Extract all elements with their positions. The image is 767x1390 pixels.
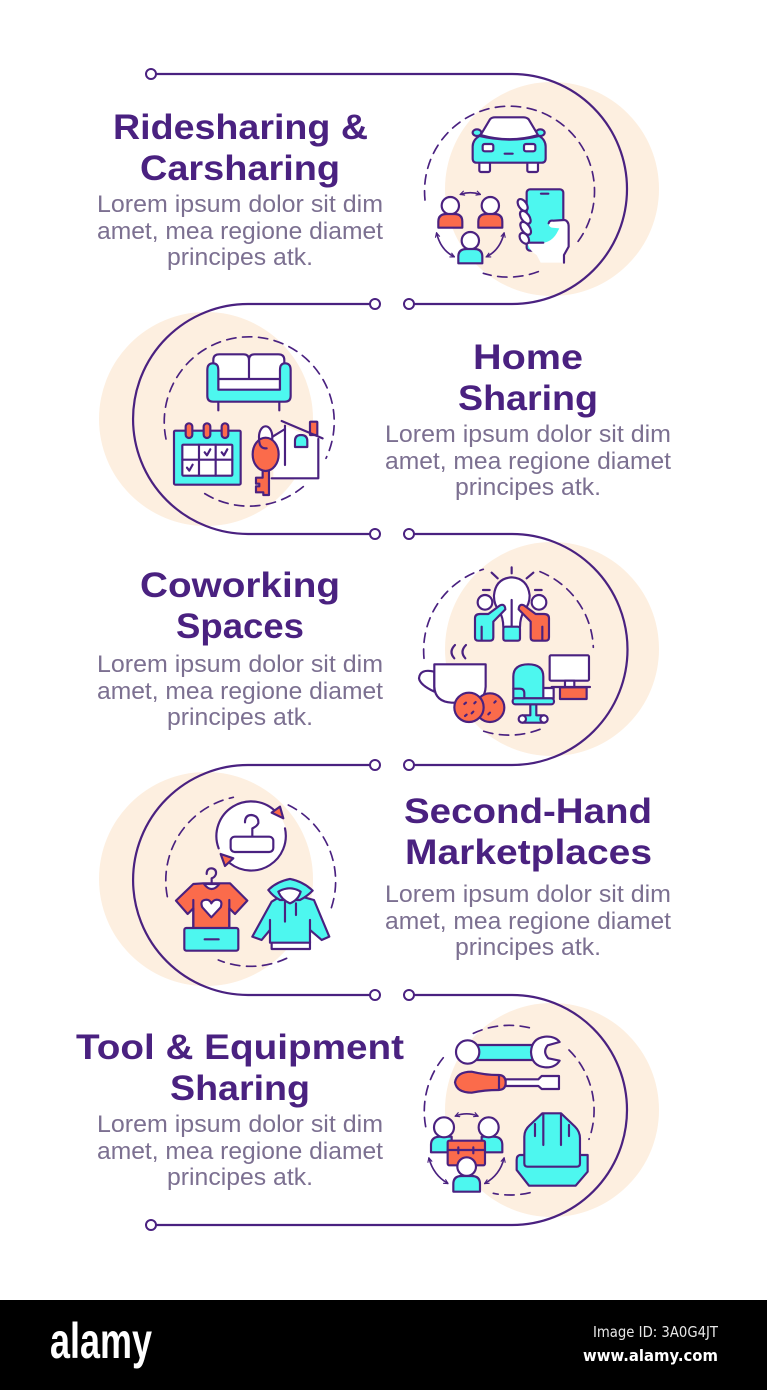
body text: amet, mea regione diamet bbox=[97, 1138, 383, 1165]
body text: principes atk. bbox=[167, 244, 313, 271]
body text: amet, mea regione diamet bbox=[385, 908, 671, 935]
peach circle bbox=[445, 542, 659, 756]
connector line bbox=[150, 995, 627, 1225]
heading: Sharing bbox=[458, 379, 598, 418]
heading: Home bbox=[473, 338, 583, 377]
peach circle bbox=[445, 1003, 659, 1217]
heading: Ridesharing & bbox=[113, 108, 368, 147]
peach circle bbox=[99, 772, 313, 986]
icon: car, people sharing, phone bbox=[425, 106, 595, 277]
connector line bbox=[409, 534, 628, 765]
body text: amet, mea regione diamet bbox=[385, 448, 671, 475]
icon: wrench, screwdriver, people with toolbox, helmet bbox=[424, 1025, 594, 1195]
heading: Tool & Equipment bbox=[76, 1028, 404, 1067]
line end node bbox=[370, 529, 380, 539]
connector line bbox=[150, 74, 627, 304]
line start node bbox=[404, 990, 414, 1000]
heading bbox=[458, 338, 598, 418]
footer bar bbox=[0, 1300, 767, 1390]
line start node bbox=[370, 299, 380, 309]
body text: Lorem ipsum dolor sit dim bbox=[385, 881, 671, 908]
heading bbox=[140, 566, 340, 646]
body text: amet, mea regione diamet bbox=[97, 678, 383, 705]
peach circle bbox=[99, 312, 313, 526]
body text: principes atk. bbox=[455, 474, 601, 501]
line end node bbox=[146, 1220, 156, 1230]
website: www.alamy.com bbox=[583, 1346, 718, 1365]
peach circle bbox=[445, 82, 659, 296]
body text bbox=[97, 1111, 383, 1191]
heading: Marketplaces bbox=[405, 833, 652, 872]
line end node bbox=[370, 990, 380, 1000]
body text bbox=[97, 651, 383, 731]
icon: idea bulb, coffee, cookies, office chair, monitor bbox=[419, 567, 593, 735]
icon: hanger cycle, t-shirt in box, hoodie bbox=[166, 797, 336, 966]
panel: second-hand marketplaces bbox=[99, 760, 671, 1000]
heading bbox=[76, 1028, 404, 1108]
heading: Carsharing bbox=[140, 149, 340, 188]
heading bbox=[404, 792, 652, 872]
body text: principes atk. bbox=[455, 934, 601, 961]
connector line bbox=[133, 765, 374, 995]
body text: principes atk. bbox=[167, 1164, 313, 1191]
body text: Lorem ipsum dolor sit dim bbox=[97, 651, 383, 678]
body text: Lorem ipsum dolor sit dim bbox=[97, 1111, 383, 1138]
line end node bbox=[404, 760, 414, 770]
body text bbox=[97, 191, 383, 271]
panel: home sharing bbox=[99, 299, 671, 539]
line end node bbox=[404, 299, 414, 309]
heading bbox=[113, 108, 368, 188]
line start node bbox=[370, 760, 380, 770]
heading: Coworking bbox=[140, 566, 340, 605]
icon: sofa, calendar, key and house bbox=[164, 337, 334, 506]
heading: Sharing bbox=[170, 1069, 310, 1108]
body text bbox=[385, 421, 671, 501]
body text bbox=[385, 881, 671, 961]
panel: tool and equipment sharing bbox=[76, 990, 659, 1230]
line start node bbox=[146, 69, 156, 79]
heading: Second-Hand bbox=[404, 792, 652, 831]
line start node bbox=[404, 529, 414, 539]
panel: coworking spaces bbox=[97, 529, 659, 770]
body text: Lorem ipsum dolor sit dim bbox=[385, 421, 671, 448]
heading: Spaces bbox=[176, 607, 304, 646]
body text: principes atk. bbox=[167, 704, 313, 731]
connector line bbox=[133, 304, 374, 534]
image id: Image ID: 3A0G4JT bbox=[593, 1323, 719, 1341]
body text: amet, mea regione diamet bbox=[97, 218, 383, 245]
body text: Lorem ipsum dolor sit dim bbox=[97, 191, 383, 218]
footer logo: alamy bbox=[50, 1313, 152, 1369]
panel: ridesharing and carsharing bbox=[97, 69, 659, 309]
